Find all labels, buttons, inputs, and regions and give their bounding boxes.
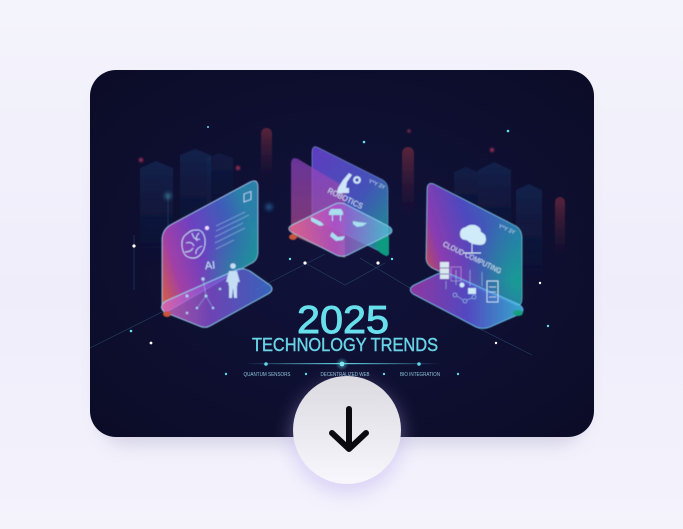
- network nodes: [446, 270, 482, 303]
- icon: robot arm: [337, 173, 352, 193]
- robotics side panel: [291, 158, 345, 258]
- panel: Robotics: [289, 147, 392, 258]
- robotics rear panel: [312, 147, 388, 254]
- download button: [291, 376, 403, 494]
- icon: brain: [182, 230, 205, 258]
- trend labels: BIO INTEGRATION: [400, 372, 440, 378]
- timeline: [245, 359, 440, 369]
- icon: servers: [440, 262, 498, 302]
- subtitle: technology trends: TECHNOLOGY TRENDS: [252, 335, 438, 355]
- icon: cloud: [460, 225, 486, 253]
- AI floor: [161, 269, 272, 328]
- robotics label: ROBOTICS: [326, 186, 364, 211]
- robots on floor: [311, 209, 367, 241]
- cloud floor: [410, 272, 523, 328]
- panel: AI: [161, 181, 272, 328]
- small label: Y*Y 3Y: [497, 224, 516, 236]
- circuit lines: [90, 196, 532, 355]
- trend labels: DECENTRALIZED WEB: [320, 372, 370, 378]
- title: 2025: 2025: [297, 299, 389, 342]
- cloud teal glow: [471, 226, 522, 304]
- icon: AI corner square: [244, 191, 251, 202]
- icon: gear: [354, 177, 360, 183]
- icon: down arrow: [332, 409, 366, 449]
- panel: Cloud Computing: [410, 183, 523, 328]
- AI text lines: [215, 212, 249, 249]
- AI label: AI: [204, 259, 216, 273]
- panel: dark card: [90, 70, 594, 444]
- trend labels: QUANTUM SENSORS: [244, 372, 291, 378]
- icon: robot figure: [226, 263, 240, 298]
- robotics floor: [289, 203, 392, 256]
- AI floor nodes: [186, 278, 221, 314]
- AI teal glow: [205, 225, 258, 282]
- cloud back panel: [426, 183, 522, 305]
- background towers: [140, 128, 566, 246]
- trend labels: [224, 372, 460, 377]
- small label: Y*Y 3Y: [367, 179, 386, 191]
- AI back panel: [162, 181, 258, 311]
- cloud label: CLOUD COMPUTING: [441, 239, 503, 276]
- glowing particles: [130, 126, 549, 344]
